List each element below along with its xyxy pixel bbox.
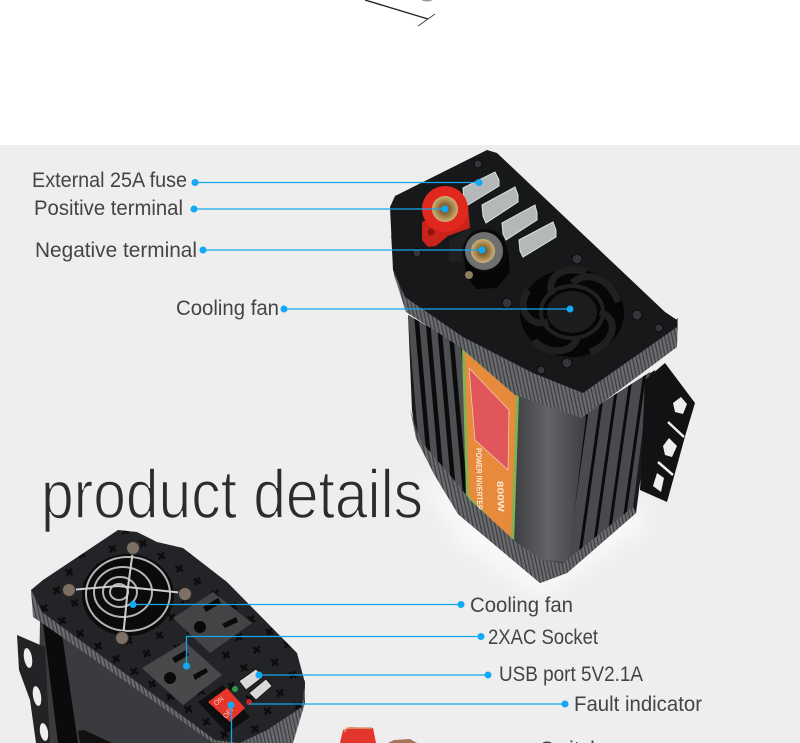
black negative terminal: [449, 228, 510, 289]
callout: upper cooling fan: Cooling fan: [176, 297, 279, 320]
label: power inverter: [462, 348, 519, 545]
upper inverter product photo: [390, 150, 695, 600]
screws: [413, 160, 663, 374]
callout: upper cooling fan: [176, 297, 574, 320]
top face: [31, 530, 305, 743]
fuses: [463, 172, 556, 257]
red positive terminal: [422, 186, 470, 247]
callout: negative terminal: [35, 239, 486, 262]
aluminium body: [38, 620, 218, 743]
callout: switch: [228, 702, 602, 743]
clamp accessory: [340, 727, 417, 743]
label: power inverter: 800W: [495, 481, 506, 513]
callout: external 25A fuse: External 25A fuse: [32, 169, 187, 192]
indicator lights: [232, 686, 252, 705]
lower inverter product photo: [17, 530, 305, 743]
callout: USB port: USB port 5V2.1A: [499, 663, 643, 686]
fuse 1: [463, 172, 499, 205]
callout: positive terminal: Positive terminal: [34, 197, 183, 220]
fuse 2: [482, 187, 518, 223]
callout: USB port: [256, 663, 643, 686]
on off switch: OFF: [222, 705, 237, 720]
callout: lower cooling fan: [130, 594, 573, 617]
foot collar: [410, 409, 636, 583]
USB ports: [237, 665, 275, 702]
top leader fragment: [365, 0, 435, 26]
callout: negative terminal: Negative terminal: [35, 239, 197, 262]
aluminium body: [408, 315, 650, 565]
rim: [391, 235, 678, 418]
top face: [390, 150, 677, 393]
AC socket left: [142, 642, 222, 705]
rim: [31, 590, 305, 743]
fuse 3: [502, 205, 537, 240]
callout: external 25A fuse: [32, 169, 482, 192]
side fin: [43, 623, 78, 743]
callout: 2XAC socket: 2XAC Socket: [488, 626, 598, 649]
floor shadow: [420, 480, 650, 600]
callout: fault indicator: [249, 693, 702, 716]
metal fan guard: [62, 542, 192, 644]
label: power inverter: POWER INVERTER: [474, 448, 484, 510]
cooling fan: [520, 269, 624, 357]
fuse 4: [519, 222, 556, 257]
callout: positive terminal: [34, 197, 448, 220]
title: product details: product details: [41, 456, 423, 533]
body backing: [408, 315, 655, 583]
callout: fault indicator: Fault indicator: [574, 693, 702, 716]
on off switch: [198, 685, 250, 733]
mounting bracket: [640, 363, 695, 502]
base slot: [78, 730, 112, 743]
mounting bracket: [17, 635, 50, 743]
AC socket right: [173, 592, 252, 653]
callout: lower cooling fan: Cooling fan: [470, 594, 573, 617]
on off switch: ON: [213, 696, 226, 708]
callout: 2XAC socket: [183, 626, 598, 670]
